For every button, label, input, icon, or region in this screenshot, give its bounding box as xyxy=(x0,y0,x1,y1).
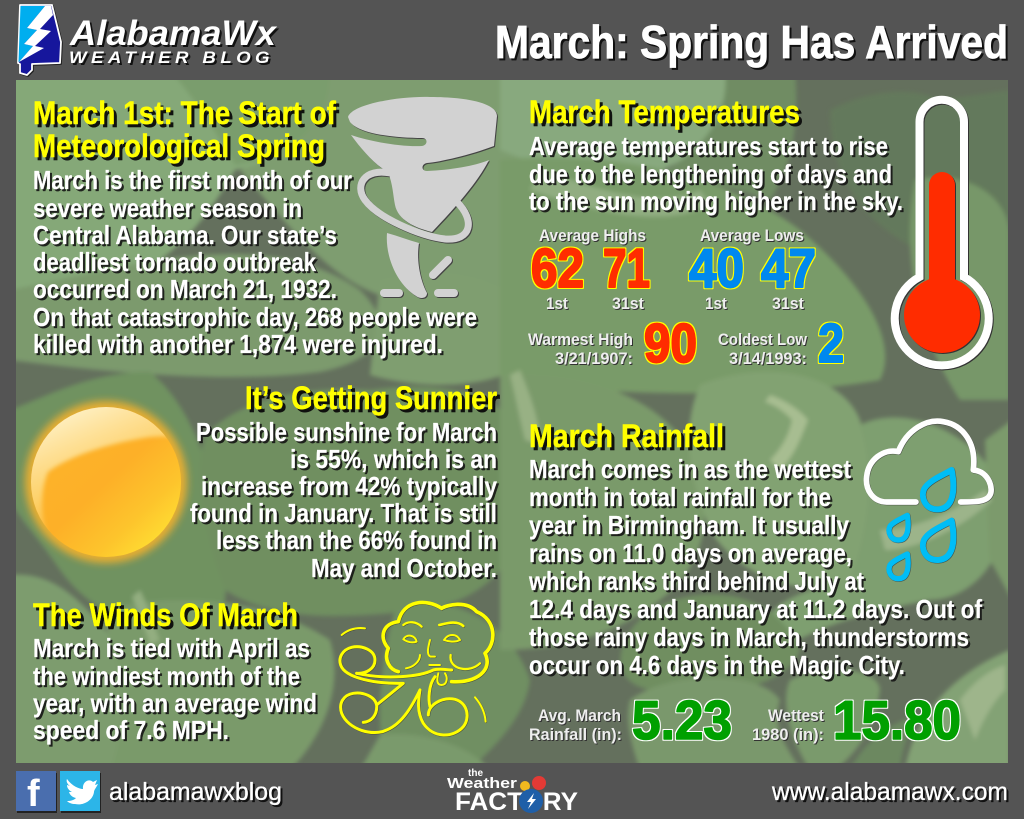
rainfall region xyxy=(500,374,704,650)
heading xyxy=(33,95,336,164)
rainfall labels xyxy=(529,706,824,744)
rainfall labels: Wettest xyxy=(768,706,824,725)
heading: Meteorological Spring xyxy=(33,128,325,164)
body text: Central Alabama. Our state’s xyxy=(33,220,337,250)
heading: March Rainfall xyxy=(529,418,724,454)
logo: AlabamaWx Weather Blog xyxy=(18,5,278,75)
body text: killed with another 1,874 were injured. xyxy=(33,329,443,359)
body text: March is the first month of our xyxy=(33,165,352,195)
temperature labels xyxy=(528,226,808,368)
body text: speed of 7.6 MPH. xyxy=(33,715,229,745)
logo: The Weather Factory: the xyxy=(468,768,483,779)
temperature labels: Average Lows xyxy=(700,226,804,245)
section: March rainfall xyxy=(528,418,982,751)
logo wordmark xyxy=(69,14,278,67)
temperature numbers: 90 xyxy=(644,312,697,374)
body text: is 55%, which is an xyxy=(290,444,497,474)
rainfall numbers: 15.80 xyxy=(833,689,961,751)
body text: year in Birmingham. It usually xyxy=(529,510,849,540)
body text: found in January. That is still xyxy=(190,498,497,528)
body text: month in total rainfall for the xyxy=(529,482,831,512)
body text: occurred on March 21, 1932. xyxy=(33,274,337,304)
body text: occur on 4.6 days in the Magic City. xyxy=(529,650,905,680)
section: March 1st start of meteorological spring xyxy=(33,95,477,359)
body text: less than the 66% found in xyxy=(216,525,497,555)
temperature numbers: 40 xyxy=(689,237,744,299)
body text: the windiest month of the xyxy=(33,661,300,691)
rainfall labels: Avg. March xyxy=(538,706,621,725)
body text: which ranks third behind July at xyxy=(528,566,864,596)
body text: Possible sunshine for March xyxy=(196,417,497,447)
temperature labels: 3/14/1993: xyxy=(729,349,807,368)
section: it's getting sunnier xyxy=(190,380,497,583)
body text: increase from 42% typically xyxy=(201,471,497,501)
icon: Alabama state with lightning bolt xyxy=(18,5,61,75)
body text: due to the lengthening of days and xyxy=(529,159,892,189)
logo: The Weather Factory: Weather xyxy=(447,775,517,792)
body text: deadliest tornado outbreak xyxy=(33,247,316,277)
footer xyxy=(16,768,1008,816)
temperature labels: 3/21/1907: xyxy=(555,349,633,368)
section: the winds of March xyxy=(33,597,317,745)
icon: facebook xyxy=(16,771,56,815)
body text xyxy=(33,165,477,359)
temperature labels: Average Highs xyxy=(539,226,646,245)
temperature labels: 1st xyxy=(705,294,727,313)
icon: thermometer xyxy=(895,100,989,365)
rainfall labels: Rainfall (in): xyxy=(529,725,622,744)
logo: The Weather Factory: FACTORY xyxy=(455,788,578,816)
icon: blowing wind cloud face xyxy=(340,602,493,735)
rainfall labels: 1980 (in): xyxy=(752,725,824,744)
temperature numbers: 62 xyxy=(531,237,584,299)
top left xyxy=(16,80,268,291)
body text: to the sun moving higher in the sky. xyxy=(529,186,903,216)
icon: rain cloud xyxy=(866,421,991,579)
logo: The Weather Factory xyxy=(447,768,578,816)
icon: tornado xyxy=(348,97,497,298)
temperature numbers: 47 xyxy=(761,237,816,299)
icon: twitter xyxy=(60,771,100,811)
logo wordmark: AlabamaWx xyxy=(69,14,278,53)
sun leaf and middle xyxy=(10,372,226,627)
website: www.alabamawx.com xyxy=(771,778,1008,806)
icon: sun xyxy=(25,400,187,563)
heading: It’s Getting Sunnier xyxy=(245,380,497,416)
logo wordmark: WEATHER BLOG xyxy=(69,48,274,67)
body text: Average temperatures start to rise xyxy=(529,131,888,161)
temperature numbers: 71 xyxy=(603,237,650,299)
rainfall numbers: 5.23 xyxy=(632,689,732,751)
social handle: alabamawxblog xyxy=(109,778,282,806)
body text: May and October. xyxy=(311,553,497,583)
section: March temperatures xyxy=(528,94,903,374)
body text: severe weather season in xyxy=(33,193,302,223)
body text: On that catastrophic day, 268 people were xyxy=(33,302,477,332)
temperature numbers: 2 xyxy=(818,312,844,374)
body text: March comes in as the wettest xyxy=(529,454,851,484)
heading: March Temperatures xyxy=(529,94,800,130)
heading: The Winds Of March xyxy=(33,597,298,633)
heading: March 1st: The Start of xyxy=(33,95,336,131)
body text: year, with an average wind xyxy=(33,688,317,718)
top right xyxy=(500,70,730,178)
body text xyxy=(33,633,317,745)
pale leaf chevrons xyxy=(765,395,808,470)
body text xyxy=(190,417,497,583)
temperature labels: 31st xyxy=(612,294,644,313)
temperature labels: Warmest High xyxy=(528,330,633,349)
icon: facebook: f xyxy=(27,773,40,815)
body text xyxy=(529,131,903,216)
temperature labels: Coldest Low xyxy=(718,330,808,349)
body text: rains on 11.0 days on average, xyxy=(529,538,852,568)
temperature labels: 31st xyxy=(772,294,804,313)
body text xyxy=(528,454,982,680)
temperature labels: 1st xyxy=(546,294,568,313)
temperature numbers xyxy=(531,237,844,374)
body text: March is tied with April as xyxy=(33,633,310,663)
rainfall numbers xyxy=(632,689,961,751)
